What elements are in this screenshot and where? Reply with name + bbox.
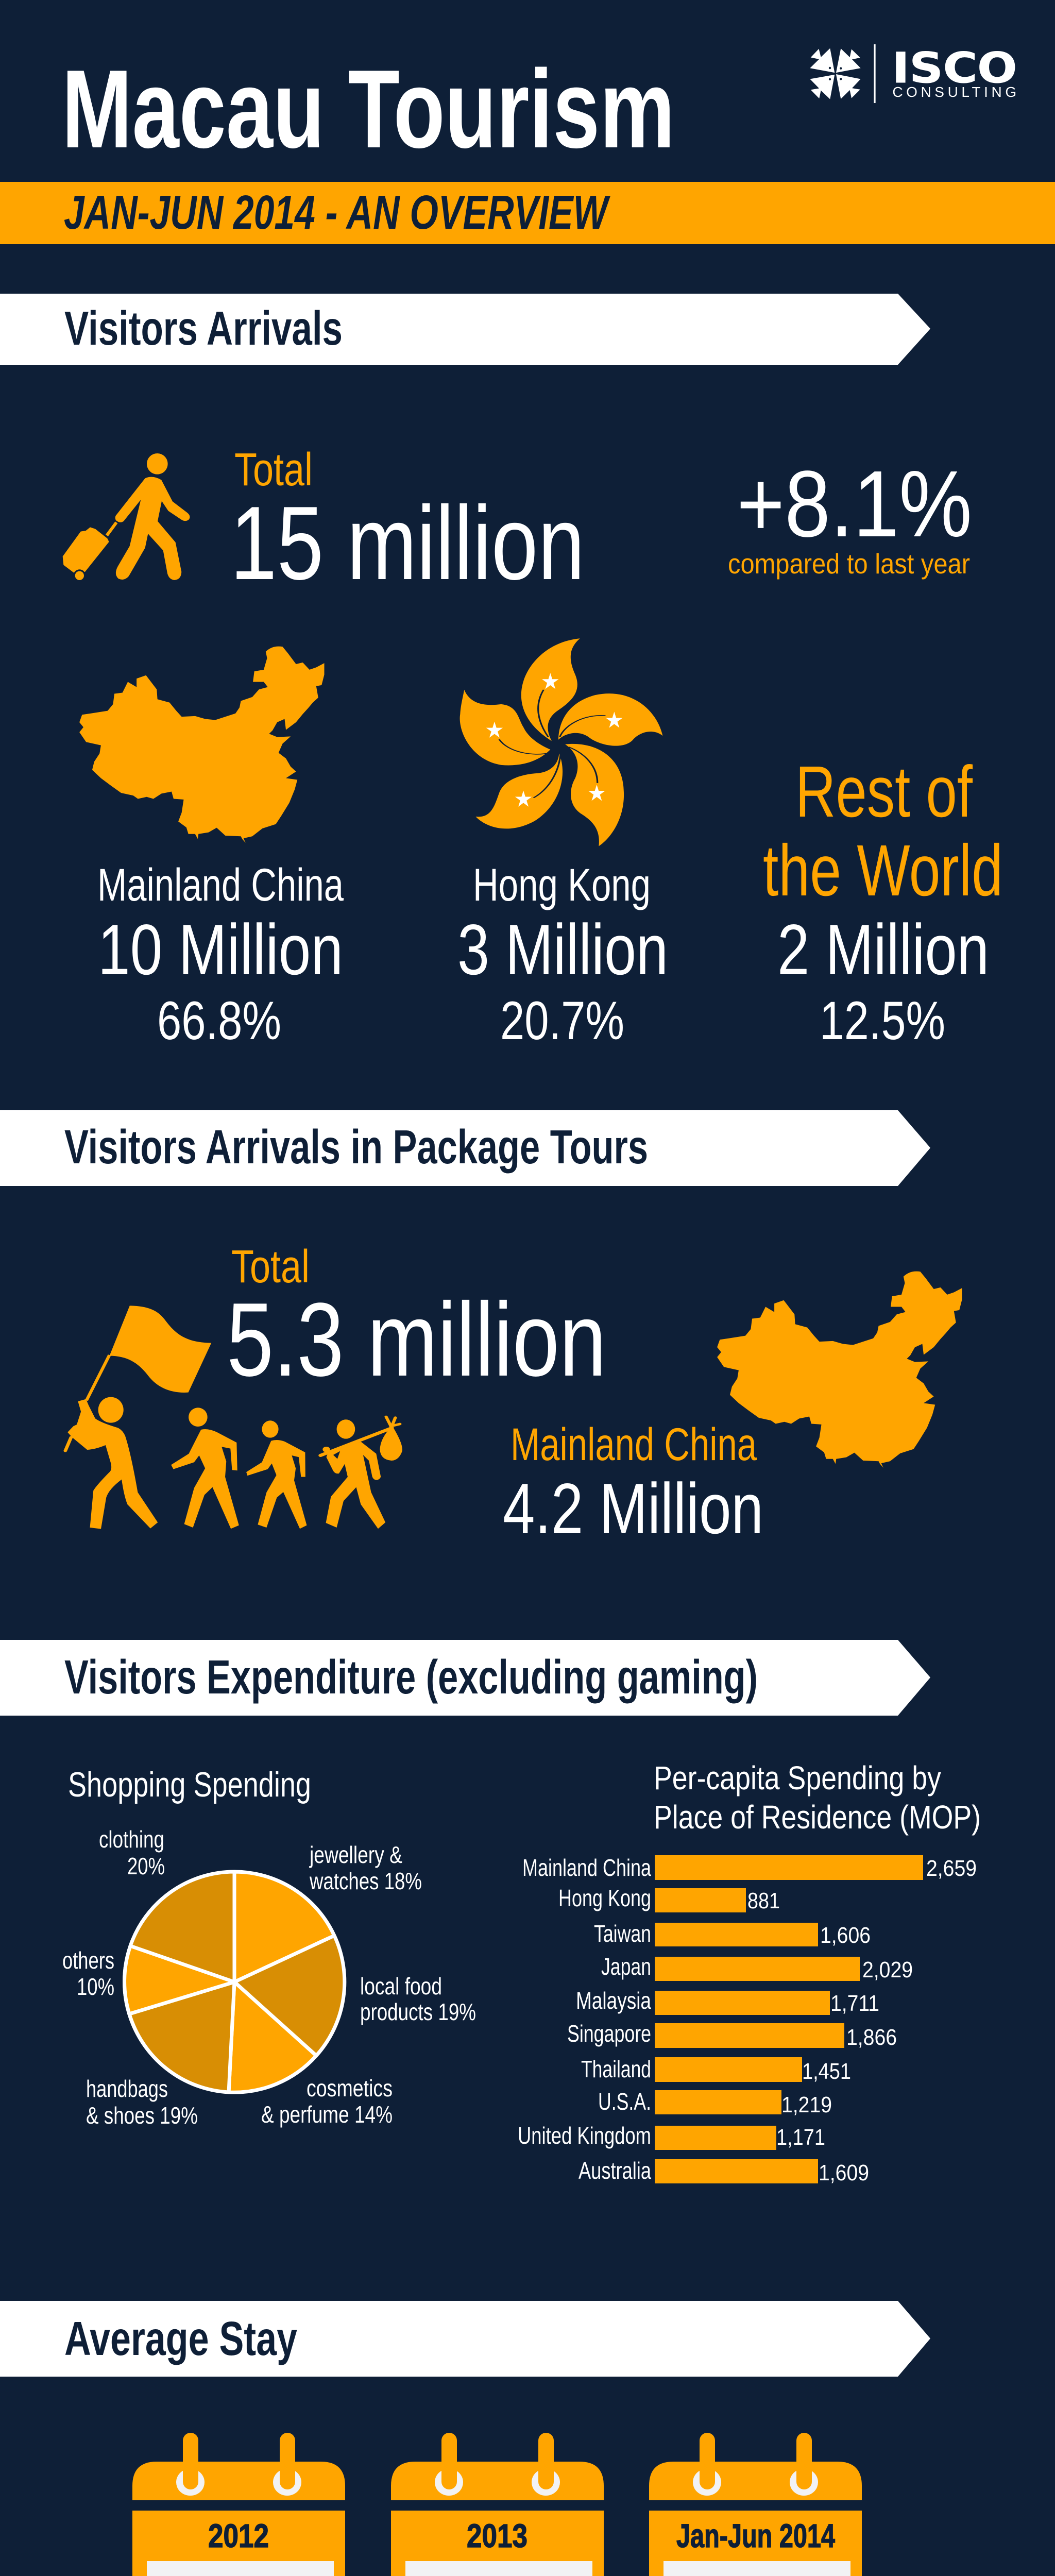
subtitle band: JAN-JUN 2014 - AN OVERVIEW (64, 185, 611, 239)
total visitors: Total (234, 444, 313, 496)
bar chart: per-capita spending: Australia (578, 2157, 651, 2184)
logo: ISCO Consulting header: ISCO (892, 44, 1017, 93)
icon: Hong Kong bauhinia flower (460, 638, 662, 846)
bar chart: per-capita spending: United Kingdom (518, 2122, 651, 2149)
bar chart: per-capita spending: Mainland China (522, 1854, 651, 1881)
stat: Mainland China (97, 859, 344, 1051)
calendar: 2012 (132, 2433, 345, 2576)
total package tours: Total (231, 1241, 310, 1293)
logo: ISCO Consulting header (810, 44, 1017, 103)
pie labels: local food (360, 1973, 442, 1999)
heading: per-capita spending: Place of Residence (MOP) (654, 1799, 981, 1836)
stat: Mainland China: 10 Million (98, 910, 343, 990)
bar chart: per-capita spending: 2,029 (862, 1957, 913, 1982)
calendar: 2012: 2012 (208, 2517, 269, 2554)
stat: Hong Kong (457, 859, 668, 1051)
heading: per-capita spending: Per-capita Spending by (654, 1759, 941, 1797)
stat: Mainland China package tours (503, 1418, 763, 1549)
icon: China map (79, 647, 324, 843)
label: rest of the world (763, 751, 1003, 911)
bar chart: per-capita spending: Singapore (567, 2020, 651, 2047)
bar chart: per-capita spending: 1,219 (781, 2092, 832, 2117)
pie labels: jewellery & (309, 1841, 402, 1868)
bar chart: per-capita spending: Thailand (581, 2056, 651, 2082)
icon: tour group with flag (65, 1306, 402, 1529)
pie labels: handbags (86, 2075, 168, 2102)
pie labels: 20% (127, 1853, 165, 1879)
pie labels: cosmetics (307, 2075, 393, 2102)
icon: China map package tours (717, 1272, 962, 1468)
pie labels: 10% (77, 1973, 114, 2000)
total package tours: 5.3 million (227, 1281, 606, 1398)
section banner: package tours: Visitors Arrivals in Package Tours (64, 1120, 648, 1174)
bar chart: per-capita spending: Hong Kong (558, 1885, 651, 1911)
section banner: package tours (0, 1110, 930, 1186)
calendar: 2013 (391, 2433, 604, 2576)
bar chart: per-capita spending (518, 1854, 977, 2185)
heading: per-capita spending (654, 1759, 981, 1836)
section banner: visitors expenditure (0, 1640, 930, 1716)
pie labels: products 19% (360, 1998, 476, 2025)
pie labels: watches 18% (309, 1868, 422, 1894)
bar chart: per-capita spending: 1,609 (819, 2160, 869, 2185)
section banner: visitors expenditure: Visitors Expenditure (excluding gaming) (64, 1650, 758, 1704)
bar chart: per-capita spending: 2,659 (926, 1856, 977, 1881)
total package tours (227, 1241, 606, 1398)
bar chart: per-capita spending: 1,171 (776, 2125, 825, 2150)
bar chart: per-capita spending: 1,451 (802, 2059, 851, 2084)
logo: ISCO Consulting header: CONSULTING (892, 84, 1016, 100)
stat: Mainland China: 66.8% (157, 991, 281, 1051)
pie labels: others (62, 1947, 114, 1974)
calendar: Jan-Jun 2014 (649, 2433, 862, 2576)
pie labels: & shoes 19% (86, 2102, 198, 2129)
pie labels (62, 1826, 476, 2129)
section banner: average stay: Average Stay (64, 2312, 297, 2365)
stat: rest of the world (777, 910, 989, 1051)
section banner: average stay (0, 2301, 930, 2377)
growth compared to last year: compared to last year (728, 548, 970, 580)
section banner: visitors arrivals: Visitors Arrivals (64, 301, 343, 355)
bar chart: per-capita spending: 881 (747, 1888, 780, 1913)
growth compared to last year: +8.1% (737, 451, 972, 556)
stat: rest of the world: 12.5% (820, 991, 945, 1051)
label: rest of the world: Rest of (795, 751, 973, 832)
bar chart: per-capita spending: Taiwan (594, 1920, 651, 1947)
stat: Mainland China package tours: 4.2 Million (503, 1469, 763, 1549)
pie chart: shopping spending (123, 1870, 346, 2094)
bar chart: per-capita spending: 1,606 (820, 1923, 871, 1948)
bar chart: per-capita spending: Malaysia (576, 1987, 651, 2014)
bar chart: per-capita spending: 1,866 (846, 2025, 897, 2050)
stat: Mainland China package tours: Mainland China (511, 1418, 757, 1470)
stat: Hong Kong: Hong Kong (473, 859, 651, 910)
bar chart: per-capita spending: Japan (601, 1953, 651, 1980)
total visitors (230, 444, 585, 602)
title: Macau Tourism (62, 46, 675, 171)
heading: shopping spending: Shopping Spending (68, 1765, 311, 1804)
pie labels: clothing (99, 1826, 164, 1853)
section banner: visitors arrivals (0, 294, 930, 365)
calendar: Jan-Jun 2014: Jan-Jun 2014 (676, 2517, 835, 2554)
total visitors: 15 million (230, 485, 585, 602)
stat: Hong Kong: 20.7% (500, 991, 624, 1051)
stat: Hong Kong: 3 Million (457, 910, 668, 990)
icon: traveler with suitcase (63, 453, 190, 582)
pie labels: & perfume 14% (261, 2101, 393, 2128)
bar chart: per-capita spending: 1,711 (830, 1991, 879, 2016)
stat: Mainland China: Mainland China (97, 859, 344, 910)
bar chart: per-capita spending: U.S.A. (598, 2088, 651, 2115)
calendar: 2013: 2013 (467, 2517, 528, 2554)
stat: rest of the world: 2 Million (777, 910, 989, 990)
subtitle band (0, 182, 1055, 244)
